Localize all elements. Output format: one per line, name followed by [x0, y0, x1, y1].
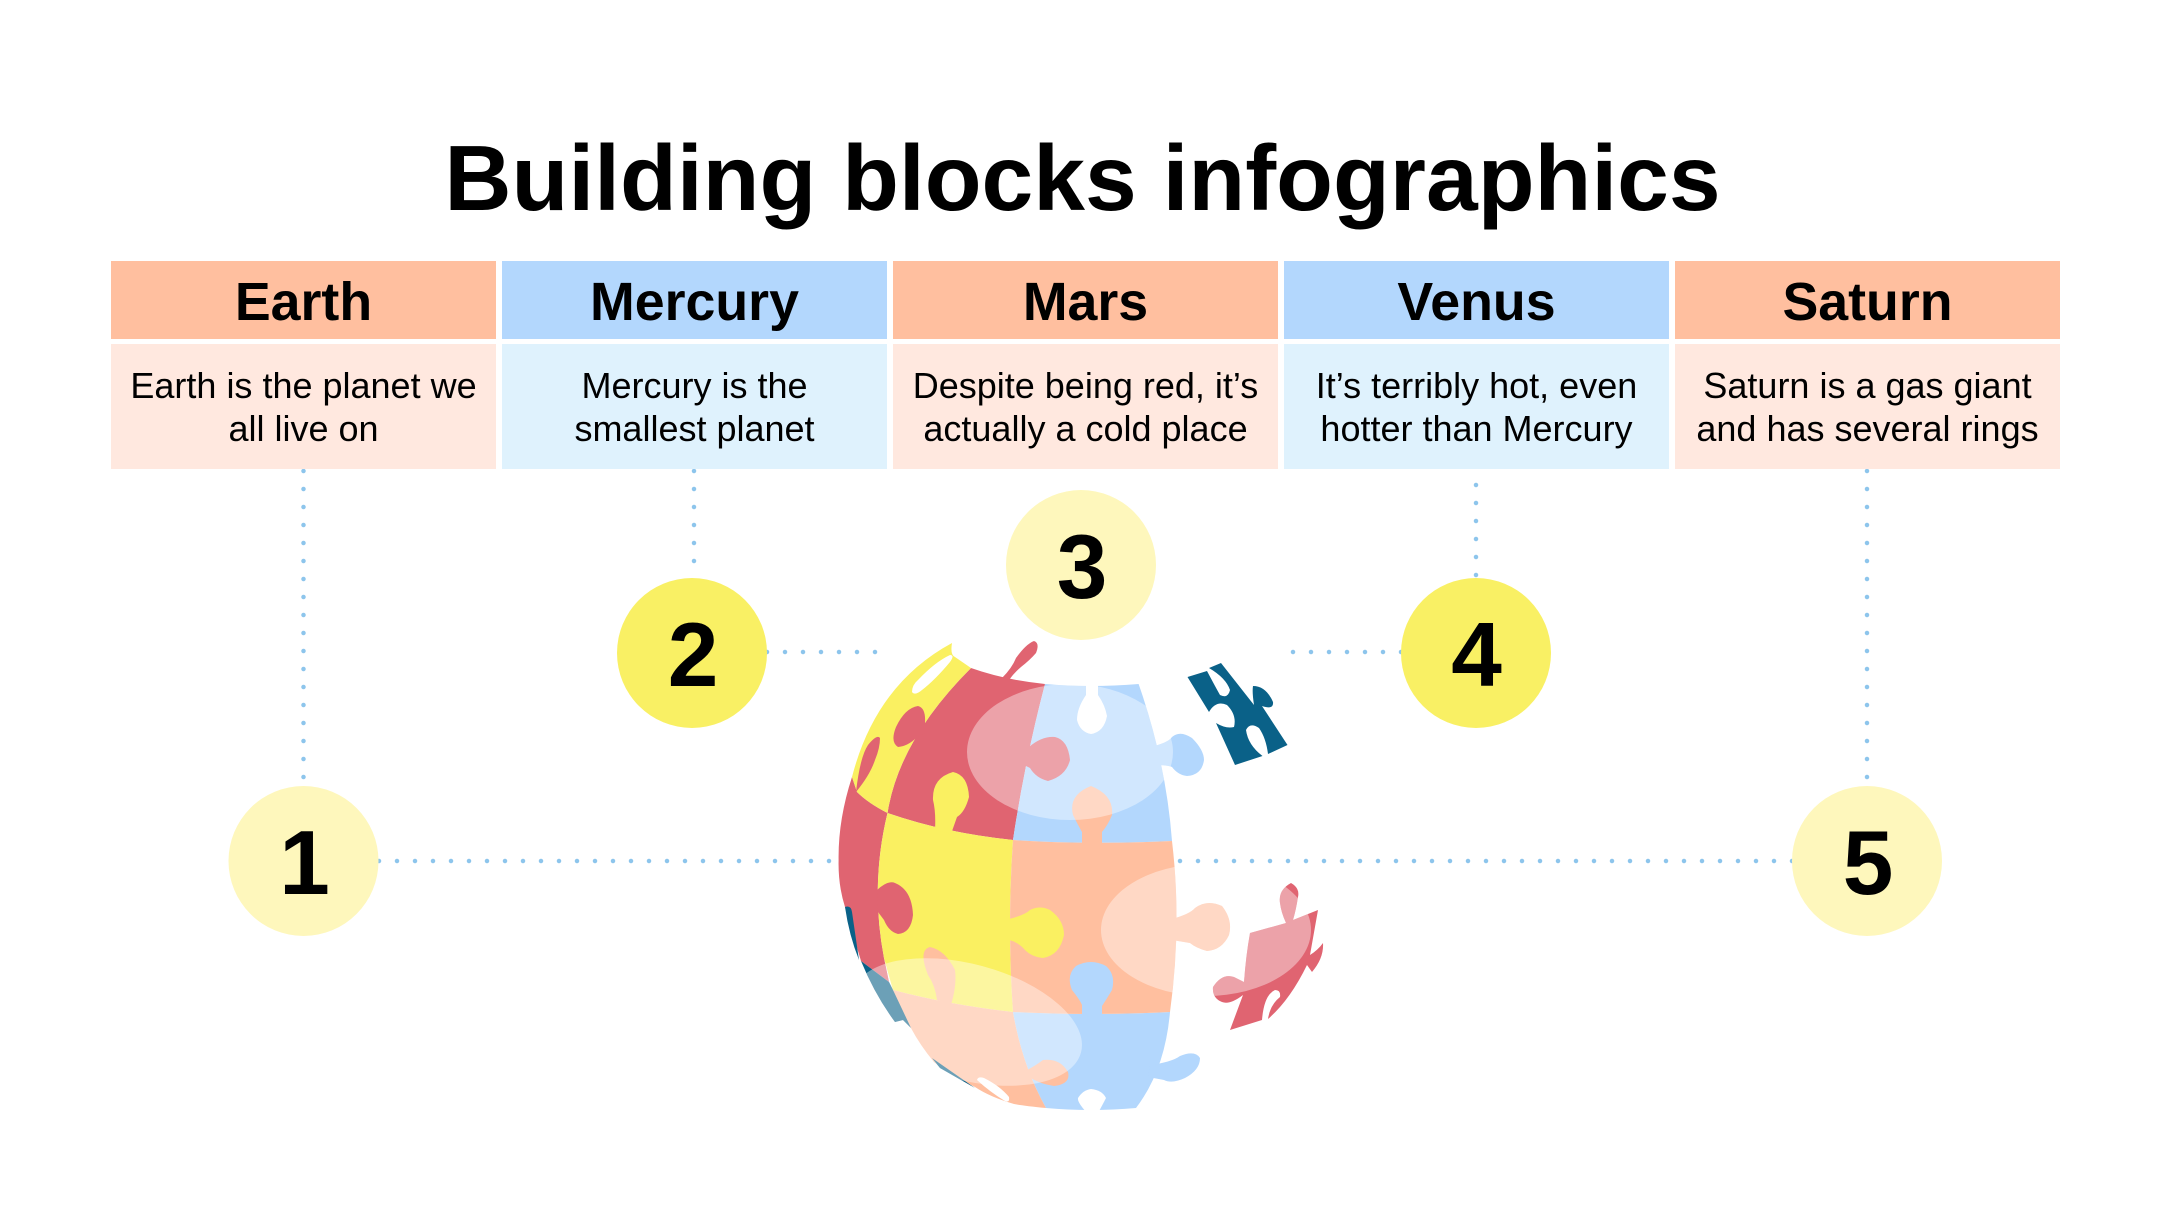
- heading: Mars: [893, 261, 1278, 339]
- text: Saturn description: Saturn is a gas giant: [1703, 365, 2032, 406]
- heading: Venus: Venus: [1397, 272, 1556, 332]
- heading: Mercury: [502, 261, 887, 339]
- number 3: [1006, 490, 1156, 640]
- text: Earth description: [111, 344, 496, 469]
- text: Mercury description: smallest planet: [574, 408, 815, 449]
- heading: Mars: Mars: [1023, 272, 1148, 332]
- text: Mercury description: [502, 344, 887, 469]
- panel: Mars: [893, 261, 1278, 469]
- heading: Earth: [111, 261, 496, 339]
- number 4: [1401, 578, 1551, 728]
- number 5: 5: [1843, 813, 1893, 914]
- text: Venus description: It’s terribly hot, even: [1316, 365, 1637, 406]
- panel: Saturn: [1675, 261, 2060, 469]
- number 2: 2: [668, 605, 718, 706]
- number 5: [1792, 786, 1942, 936]
- heading: Mercury: Mercury: [590, 272, 799, 332]
- text: Venus description: hotter than Mercury: [1320, 408, 1633, 449]
- number 2: [617, 578, 767, 728]
- text: Mars description: Despite being red, it’s: [913, 365, 1258, 406]
- title: Building blocks infographics: [444, 126, 1721, 230]
- panel: Earth: [111, 261, 496, 469]
- number 3: 3: [1057, 517, 1107, 618]
- number 1: 1: [279, 813, 330, 914]
- text: Earth description: Earth is the planet we: [130, 365, 477, 406]
- heading: Saturn: Saturn: [1782, 272, 1953, 332]
- heading: Saturn: [1675, 261, 2060, 339]
- panel: Venus: [1284, 261, 1669, 469]
- heading: Venus: [1284, 261, 1669, 339]
- text: Mars description: actually a cold place: [923, 408, 1248, 449]
- text: Mercury description: Mercury is the: [581, 365, 808, 406]
- heading: Earth: Earth: [235, 272, 372, 332]
- text: Earth description: all live on: [228, 408, 379, 449]
- number 1: [228, 786, 378, 936]
- text: Saturn description: and has several rings: [1696, 408, 2039, 449]
- number 4: 4: [1451, 605, 1502, 706]
- text: Venus description: [1284, 344, 1669, 469]
- text: Mars description: [893, 344, 1278, 469]
- text: Saturn description: [1675, 344, 2060, 469]
- icon: puzzle globe: [838, 641, 1323, 1113]
- panel: Mercury: [502, 261, 887, 469]
- icon: detached dark blue puzzle piece: [1188, 663, 1288, 765]
- connector lines and puzzle globe: [228, 469, 1942, 1110]
